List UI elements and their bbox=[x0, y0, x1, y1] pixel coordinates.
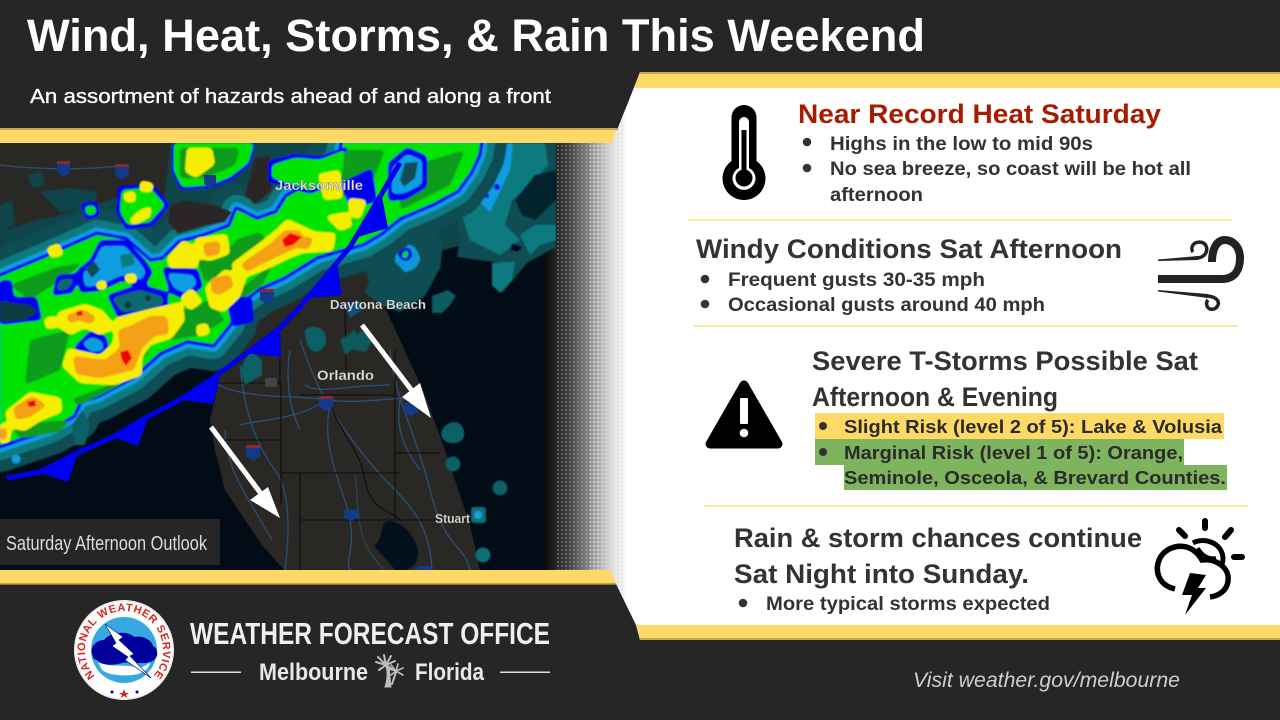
interstate shields bbox=[57, 161, 431, 572]
map caption bbox=[0, 519, 220, 565]
office name: Florida bbox=[415, 659, 485, 686]
main echo halos bbox=[0, 143, 480, 445]
yellow band: under header bbox=[0, 128, 617, 143]
lake okeechobee bbox=[374, 521, 418, 571]
panel: right white content panel bbox=[612, 72, 1280, 640]
highlight: slight risk bbox=[815, 413, 1224, 439]
section: rain and storm chances: Rain & storm chances continue bbox=[734, 523, 1142, 553]
halftone fade between map and panel bbox=[545, 110, 627, 610]
icon: warning triangle bbox=[710, 385, 778, 444]
section: rain and storm chances: Sat Night into Sunday. bbox=[734, 559, 1029, 589]
yellow band: above footer bbox=[0, 570, 616, 584]
yellow band: top of right panel bbox=[634, 72, 1280, 88]
office name bbox=[190, 616, 550, 687]
website link: Visit weather.gov/melbourne bbox=[913, 669, 1180, 692]
land bbox=[0, 143, 480, 571]
city labels: Daytona Beach bbox=[330, 298, 426, 312]
east offshore teal bbox=[360, 143, 556, 300]
section: severe storms bbox=[812, 346, 1227, 490]
main green mass bbox=[0, 143, 480, 445]
north clusters bbox=[80, 143, 348, 230]
radar map bbox=[0, 143, 556, 572]
ocean bbox=[0, 143, 546, 571]
red cores bbox=[27, 233, 302, 407]
section: severe storms: Afternoon & Evening bbox=[812, 382, 1058, 412]
cold front bbox=[7, 163, 400, 482]
yellow band: bottom of right panel bbox=[636, 625, 1280, 639]
section: rain and storm chances: More typical storms expected bbox=[766, 594, 1050, 615]
section: near record heat: afternoon bbox=[830, 185, 923, 206]
highlight: slight risk: Slight Risk (level 2 of 5): Lake & Volusia bbox=[844, 416, 1223, 437]
section: windy conditions: Frequent gusts 30-35 mph bbox=[728, 270, 985, 291]
section: near record heat: Highs in the low to mid 90s bbox=[830, 134, 1093, 155]
dark green patches bbox=[10, 148, 465, 438]
panel: footer bbox=[0, 584, 1280, 720]
icon: storm cloud with sun bbox=[1157, 521, 1242, 615]
yellow cores bbox=[0, 148, 367, 444]
section: rain and storm chances bbox=[734, 523, 1142, 615]
offshore cells bbox=[441, 422, 464, 443]
map caption: Saturday Afternoon Outlook bbox=[6, 533, 208, 555]
roads and county lines bbox=[0, 165, 470, 570]
panel: header bbox=[0, 0, 1280, 130]
arrow: south-east wind, west coast bbox=[211, 427, 280, 518]
section: near record heat bbox=[798, 99, 1191, 206]
city labels: Jacksonville bbox=[275, 178, 364, 193]
orange cores bbox=[0, 230, 314, 440]
title: Wind, Heat, Storms, & Rain This Weekend bbox=[27, 10, 925, 61]
section: windy conditions bbox=[696, 234, 1122, 316]
section: windy conditions: Occasional gusts around 40 mph bbox=[728, 295, 1045, 316]
subtitle: An assortment of hazards ahead of and along a front bbox=[30, 85, 551, 108]
icon: wind bbox=[1158, 240, 1240, 309]
arrow: south-east wind, east coast bbox=[362, 325, 431, 418]
highlight: marginal risk: Marginal Risk (level 1 of 5): Orange, bbox=[844, 442, 1183, 463]
icon: palm trees bbox=[376, 655, 403, 687]
section: near record heat: No sea breeze, so coast will be hot all bbox=[830, 159, 1191, 180]
city labels: Stuart bbox=[435, 512, 471, 526]
icon: thermometer bbox=[723, 105, 765, 200]
land gaps north of the mass bbox=[168, 155, 272, 234]
section: severe storms: Severe T-Storms Possible Sat bbox=[812, 346, 1198, 376]
city labels bbox=[275, 178, 471, 526]
light teal north-west patches bbox=[0, 143, 460, 280]
highlight: marginal risk bbox=[815, 439, 1227, 490]
highlight: marginal risk: Seminole, Osceola, & Brevard Counties. bbox=[844, 467, 1226, 488]
city labels: Orlando bbox=[317, 367, 374, 383]
office name: WEATHER FORECAST OFFICE bbox=[190, 616, 550, 651]
office name: Melbourne bbox=[259, 659, 368, 686]
section: windy conditions: Windy Conditions Sat Afternoon bbox=[696, 234, 1122, 264]
blue lakes inside mass bbox=[0, 147, 427, 358]
radar echoes bbox=[0, 143, 556, 562]
section: near record heat: Near Record Heat Saturday bbox=[798, 99, 1161, 129]
logo: National Weather Service: NATIONAL WEATHER SERVICE bbox=[78, 603, 171, 680]
